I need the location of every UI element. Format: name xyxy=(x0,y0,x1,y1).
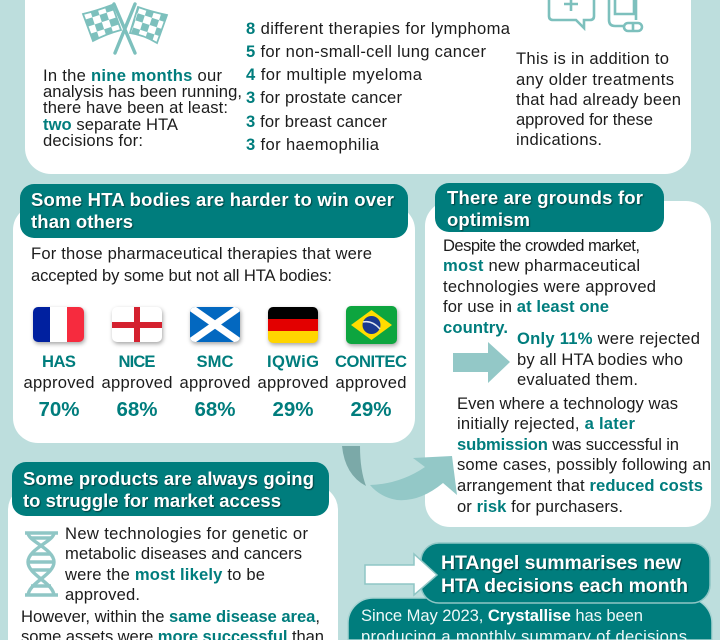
text: older treatments note: This is in addition to xyxy=(516,49,669,68)
text: crowded market: Despite the crowded market, xyxy=(443,236,640,255)
heading: grounds for optimism: There are grounds for xyxy=(447,187,643,208)
flag: Germany xyxy=(268,307,318,343)
heading: market access: Some products are always going xyxy=(23,468,314,489)
list: therapies by indication: 8 different therapies for lymphoma xyxy=(246,19,511,38)
column: IQWiG: 29% xyxy=(272,398,314,421)
text: older treatments note: indications. xyxy=(516,130,602,149)
text: Crystallise summary: Since May 2023, Crystallise has been xyxy=(361,606,643,625)
column: CONITEC xyxy=(335,352,407,421)
text: later submission: submission was successful in xyxy=(457,435,679,454)
column: CONITEC: 29% xyxy=(350,398,392,421)
list: therapies by indication: 3 for prostate cancer xyxy=(246,88,402,107)
text: later submission xyxy=(457,394,711,516)
text: most likely: metabolic diseases and cancers xyxy=(65,544,302,563)
heading: HTAngel: HTA decisions each month xyxy=(441,575,688,597)
text: nine months: there have been at least: xyxy=(43,98,228,117)
column: HAS: HAS xyxy=(42,352,76,371)
text: intro: accepted by some but not all HTA bodies: xyxy=(31,266,332,285)
column: IQWiG: approved xyxy=(258,373,328,392)
text: older treatments note: any older treatments xyxy=(516,70,674,89)
text: crowded market: country. xyxy=(443,318,508,337)
arrow: white to HTAngel xyxy=(365,554,437,595)
heading: grounds for optimism: optimism xyxy=(447,209,530,230)
column: SMC: SMC xyxy=(196,352,234,371)
icon: document and pill xyxy=(609,0,642,31)
text: crowded market: technologies were approved xyxy=(443,277,656,296)
icon: DNA helix xyxy=(25,533,58,596)
text: rejected note: Only 11% were rejected xyxy=(517,329,700,348)
column: IQWiG xyxy=(258,352,328,421)
flag: Brazil xyxy=(346,306,397,344)
list: therapies by indication: 3 for breast cancer xyxy=(246,112,387,131)
text: same disease area: However, within the same disease area, xyxy=(21,607,320,626)
text: most likely: approved. xyxy=(65,585,140,604)
column: CONITEC: CONITEC xyxy=(335,352,407,371)
flag: Scotland xyxy=(190,307,240,342)
list: therapies by indication: 3 for haemophilia xyxy=(246,135,380,154)
list: therapies by indication: 4 for multiple myeloma xyxy=(246,65,423,84)
text: intro xyxy=(31,244,372,285)
column: CONITEC: approved xyxy=(336,373,406,392)
heading: harder to win over: Some HTA bodies are harder to win over xyxy=(31,189,394,210)
column: IQWiG: IQWiG xyxy=(267,352,319,371)
heading: HTAngel: HTAngel summarises new xyxy=(441,552,682,574)
text: nine months: In the nine months our xyxy=(43,66,222,85)
text: nine months: analysis has been running, xyxy=(43,82,242,101)
column: HAS xyxy=(24,352,94,421)
flag: England xyxy=(112,307,162,342)
column: HAS: 70% xyxy=(38,398,80,421)
text: older treatments note: that had already been xyxy=(516,90,681,109)
list: therapies by indication: 5 for non-small-cell lung cancer xyxy=(246,42,486,61)
list: therapies by indication xyxy=(246,19,511,154)
column: SMC xyxy=(180,352,250,421)
text: crowded market: for use in at least one xyxy=(443,297,609,316)
text: nine months: decisions for: xyxy=(43,131,143,150)
heading: HTAngel xyxy=(421,543,710,603)
panel: approvals summary xyxy=(25,0,691,174)
text: crowded market xyxy=(443,236,656,337)
text: older treatments note: approved for these xyxy=(516,110,653,129)
flag: France xyxy=(33,307,84,342)
text: most likely: New technologies for genetic or xyxy=(65,524,308,543)
column: NICE: 68% xyxy=(116,398,158,421)
panel: grounds for optimism xyxy=(425,183,711,527)
heading: harder to win over: than others xyxy=(31,211,133,232)
text: most likely: were the most likely to be xyxy=(64,565,265,584)
panel: market access xyxy=(8,462,338,640)
heading: market access: to struggle for market access xyxy=(23,490,281,511)
column: HAS: approved xyxy=(24,373,94,392)
column: SMC: 68% xyxy=(194,398,236,421)
text: crowded market: most new pharmaceutical xyxy=(443,256,640,275)
icon: speech bubble with plus xyxy=(549,0,594,28)
text: intro: For those pharmaceutical therapies that were xyxy=(31,244,372,263)
panel: HTAngel description xyxy=(348,598,712,640)
icon: crossed chequered flags xyxy=(83,4,167,53)
heading: grounds for optimism xyxy=(435,183,664,232)
column: SMC: approved xyxy=(180,373,250,392)
column: NICE: NICE xyxy=(118,352,156,371)
text: rejected note: evaluated them. xyxy=(517,370,638,389)
text: later submission: arrangement that reduced costs xyxy=(457,476,703,495)
text: Crystallise summary xyxy=(361,606,687,640)
column: NICE: approved xyxy=(102,373,172,392)
text: older treatments note xyxy=(516,49,681,149)
arrow: curved arrow head xyxy=(370,456,457,500)
text: nine months: two separate HTA xyxy=(43,115,179,134)
arrow: to rejected note xyxy=(453,342,510,383)
text: rejected note: by all HTA bodies who xyxy=(517,350,683,369)
text: later submission: initially rejected, a later xyxy=(457,414,636,433)
arrow: curved connector xyxy=(342,446,366,486)
text: same disease area xyxy=(21,607,324,640)
heading: market access xyxy=(12,462,329,516)
text: nine months xyxy=(43,66,242,150)
heading: harder to win over xyxy=(20,184,408,238)
text: later submission: or risk for purchasers. xyxy=(457,497,623,516)
text: later submission: some cases, possibly following an xyxy=(457,455,711,474)
panel: HTA bodies xyxy=(13,184,415,443)
column: NICE xyxy=(102,352,172,421)
text: later submission: Even where a technology was xyxy=(457,394,678,413)
text: rejected note xyxy=(517,329,700,389)
text: most likely xyxy=(64,524,308,604)
